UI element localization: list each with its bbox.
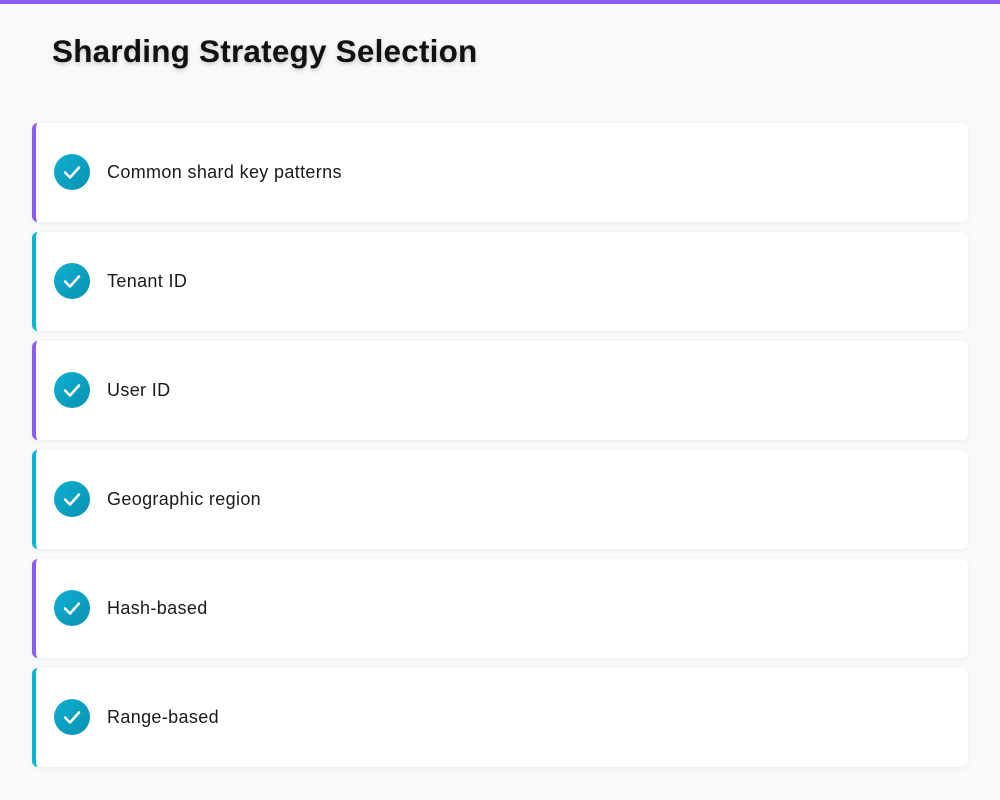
card: user id: User ID: [107, 380, 170, 400]
card: hash-based: Hash-based: [107, 598, 208, 618]
card: range-based: [32, 668, 968, 767]
card: geographic region: Geographic region: [107, 489, 261, 509]
title: Sharding Strategy Selection: [52, 33, 478, 69]
card: common shard key patterns: Common shard key patterns: [107, 162, 342, 182]
card: geographic region: [32, 450, 968, 549]
card: hash-based: [32, 559, 968, 658]
top accent bar: [0, 0, 1000, 4]
card: user id: [32, 341, 968, 440]
card: tenant id: [32, 232, 968, 331]
card: range-based: Range-based: [107, 707, 219, 727]
card: common shard key patterns: [32, 123, 968, 222]
card: tenant id: Tenant ID: [107, 271, 187, 291]
